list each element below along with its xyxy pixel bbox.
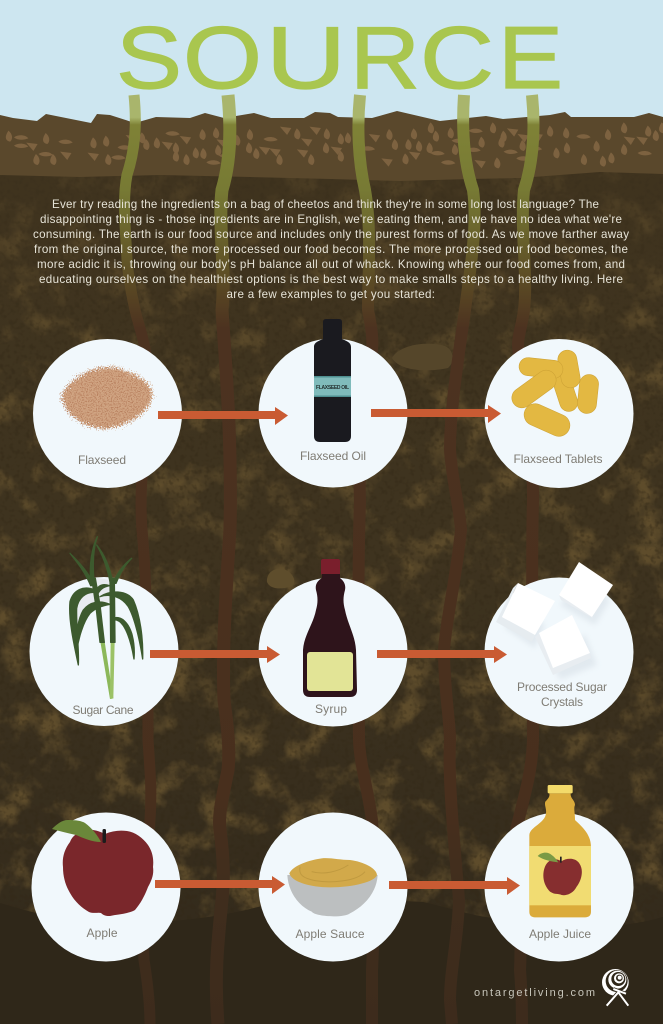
title	[116, 8, 563, 107]
circle: apple	[32, 812, 180, 962]
arrow	[150, 646, 280, 663]
roots	[125, 95, 533, 1024]
icon: flaxseed pile	[62, 367, 152, 429]
label: flaxseed oil: Flaxseed Oil	[300, 449, 366, 463]
arrow	[158, 407, 288, 425]
label: syrup: Syrup	[315, 702, 347, 716]
icon: bowl of apple sauce	[287, 858, 378, 916]
circle: processed sugar	[484, 578, 634, 726]
icon: sugar cane	[70, 537, 143, 699]
icon: oil bottle: FLAXSEED OIL	[316, 385, 349, 391]
intro text block: more acidic it is, throwing our body's pH balance all out of whack. Knowing where our food comes from, and	[37, 258, 625, 271]
label: apple juice: Apple Juice	[529, 927, 591, 941]
arrow	[155, 876, 285, 894]
icon: apple juice bottle	[529, 785, 591, 917]
label: apple sauce: Apple Sauce	[296, 927, 365, 941]
icon: apple	[52, 820, 153, 916]
intro text block: disappointing thing is - those ingredients are in English, we're eating them, and we have no idea what we're	[40, 213, 622, 226]
title: E	[498, 8, 563, 107]
rock	[267, 569, 294, 588]
arrow	[389, 877, 520, 895]
intro text block	[33, 198, 629, 301]
intro text block: educating ourselves on the healthiest options is the best way to make smalls steps to a healthy living. Here	[39, 273, 623, 286]
soil background	[0, 170, 663, 930]
rock	[392, 344, 453, 370]
icon: flaxseed tablets	[508, 349, 599, 440]
circle: flaxseed oil	[258, 338, 408, 488]
title: C	[420, 8, 494, 107]
label: processed sugar crystals: Processed Sugar	[517, 680, 607, 694]
dark bottom mound	[0, 899, 663, 1024]
intro text block: consuming. The earth is our food source and includes only the purest forms of food. As we move farther away	[33, 228, 629, 241]
intro text block: are a few examples to get you started:	[226, 288, 435, 301]
arrow	[377, 646, 507, 663]
title: O	[183, 8, 262, 107]
circle: apple juice	[484, 812, 634, 962]
title: S	[116, 8, 182, 107]
circle: syrup	[258, 578, 408, 726]
circle: apple sauce	[258, 812, 408, 962]
website url: ontargetliving.com	[474, 987, 595, 999]
arrow	[371, 405, 501, 423]
sky	[0, 0, 663, 125]
soil chips	[6, 122, 663, 168]
circle: sugar cane	[30, 577, 178, 726]
title: U	[266, 8, 346, 107]
label: apple: Apple	[86, 926, 118, 940]
top soil band	[0, 111, 663, 181]
circle: flaxseed	[33, 339, 182, 488]
row 3: apple	[32, 785, 634, 962]
intro text block: Ever try reading the ingredients on a bag of cheetos and think they're in some long lost language? The	[52, 198, 599, 211]
icon: sugar cubes	[496, 562, 613, 680]
intro text block: from the original source, the more processed our food becomes. The more processed our food becomes, the	[34, 243, 628, 256]
icon: syrup bottle	[303, 559, 357, 697]
label: processed sugar crystals: Crystals	[541, 695, 583, 709]
circle: flaxseed tablets	[484, 339, 634, 488]
title: R	[350, 8, 420, 107]
label: sugar cane: Sugar Cane	[72, 703, 134, 717]
logo	[602, 969, 629, 1006]
label: processed sugar crystals	[517, 680, 607, 709]
label: flaxseed tablets: Flaxseed Tablets	[514, 452, 602, 466]
row 2: sugar	[30, 537, 634, 726]
icon: oil bottle	[314, 319, 351, 442]
label: flaxseed: Flaxseed	[78, 453, 126, 467]
row 1: flaxseed	[33, 319, 634, 488]
